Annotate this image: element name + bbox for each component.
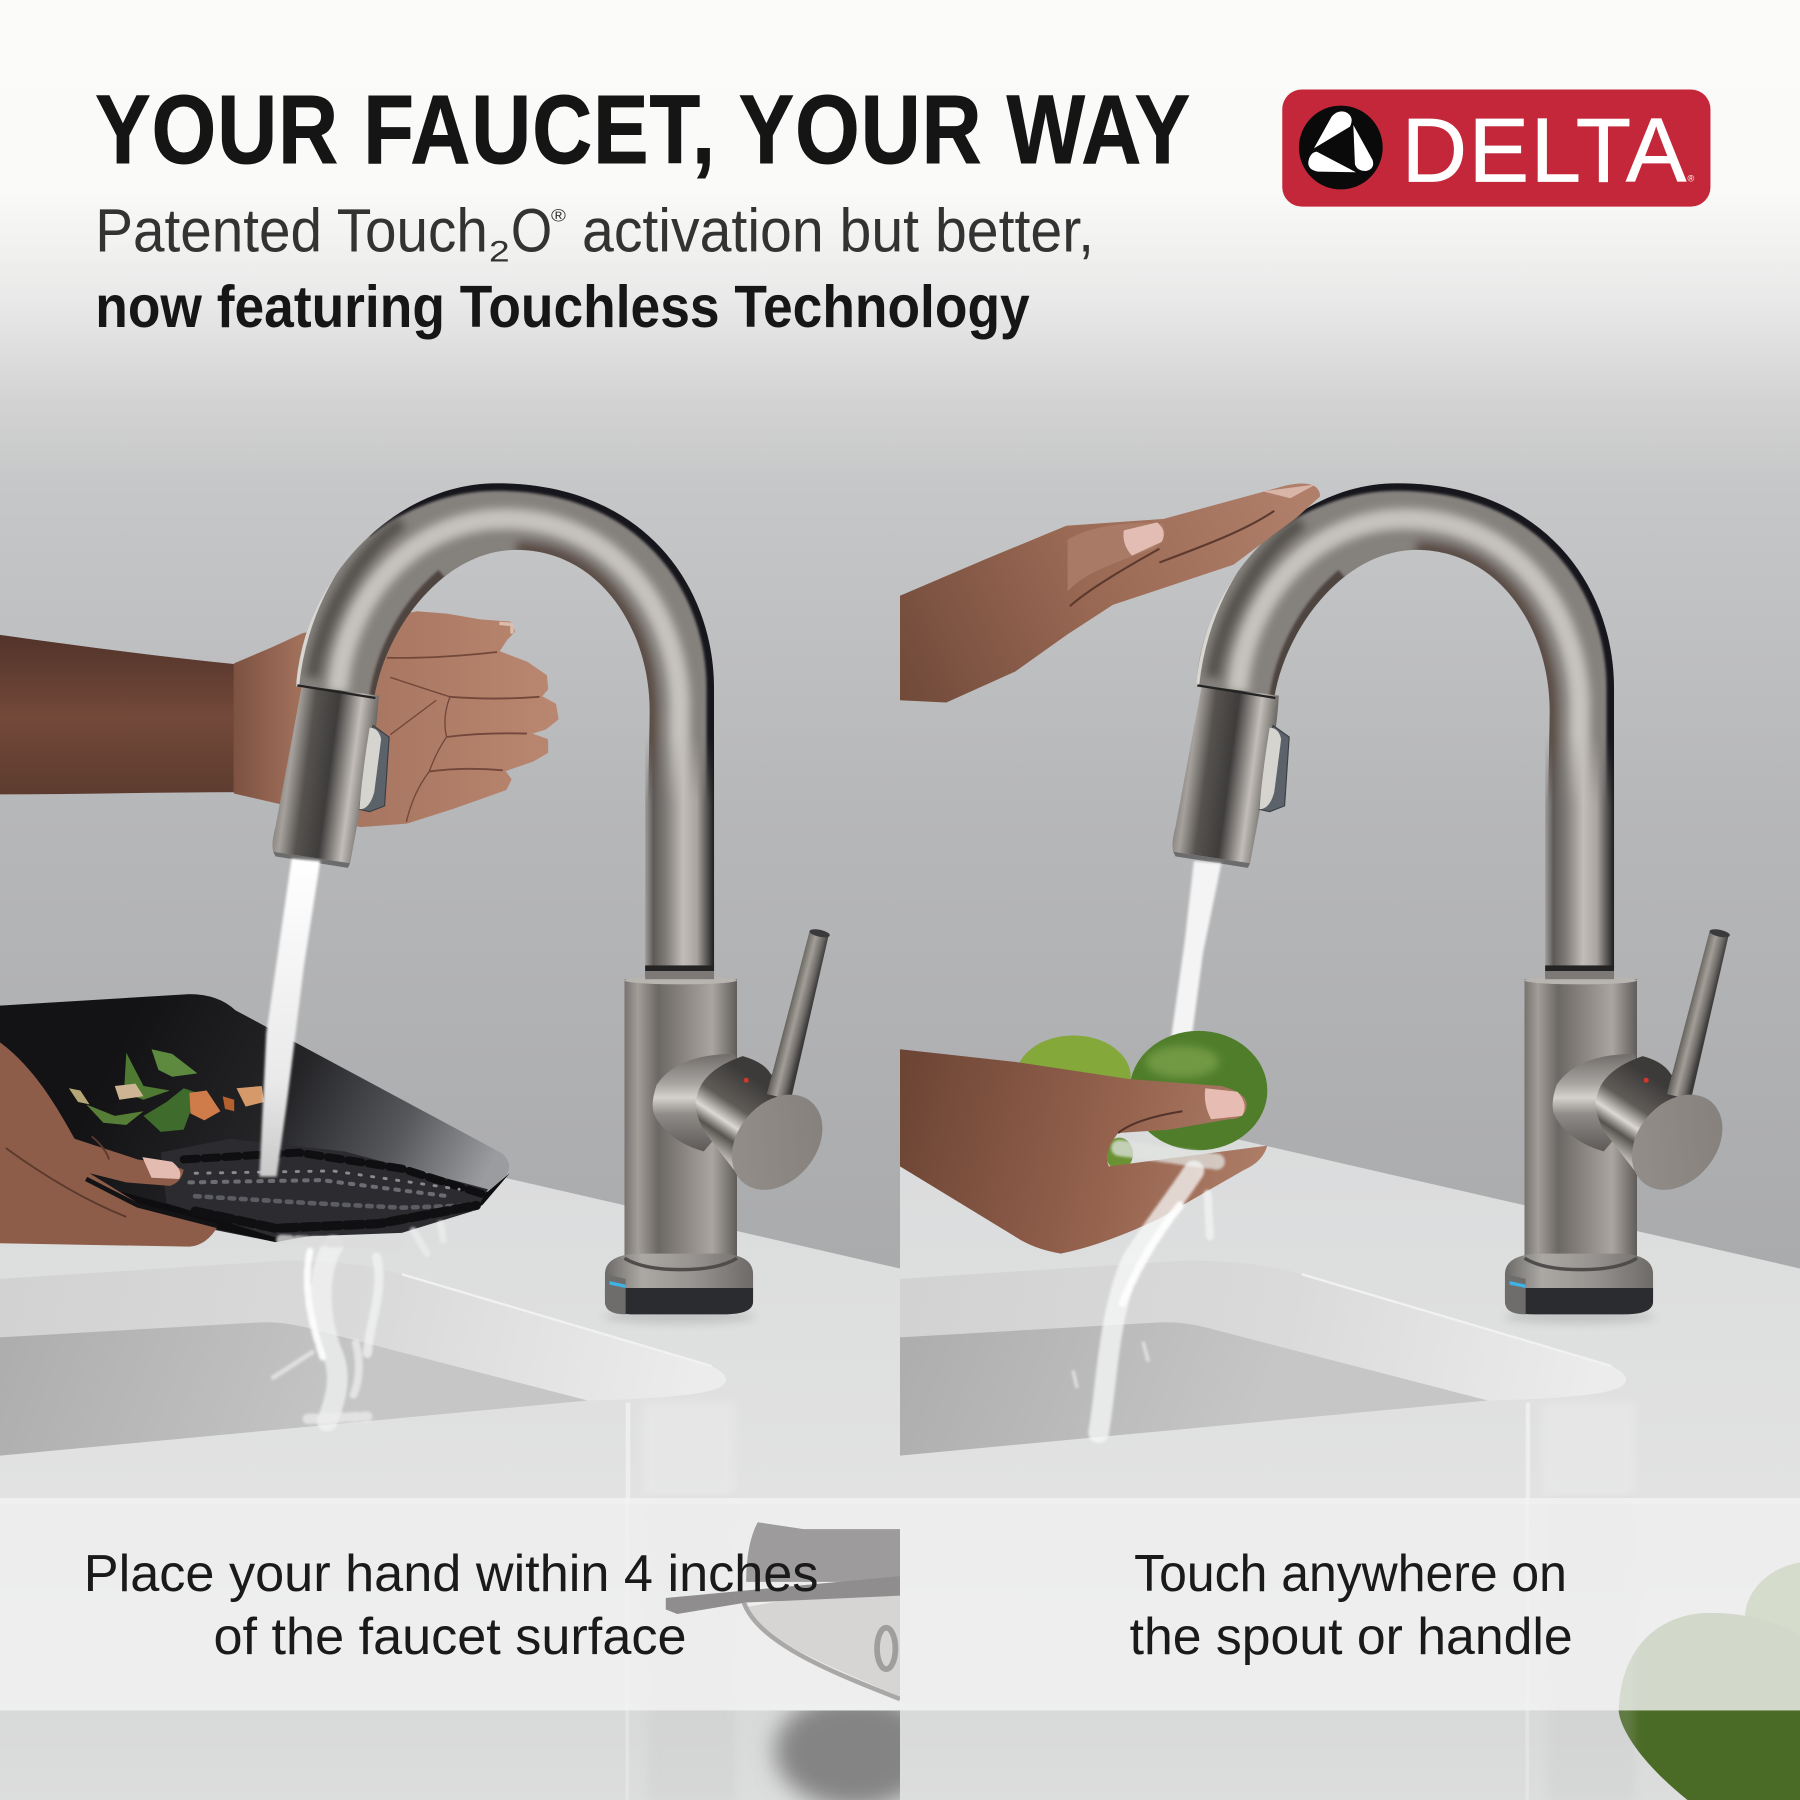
water falling from plate [273,1224,443,1421]
caption left [84,1544,818,1665]
hand holding limes [900,1049,1267,1254]
subheading line 1: Patented Touch [95,196,488,264]
reflection: plate shadow [762,1710,900,1800]
hand holding plate [0,1042,218,1247]
Delta logo: ® [1688,173,1695,183]
panel: lime rinse scene [900,483,1800,1504]
caption left: of the faucet surface [214,1607,686,1665]
reflection streaks [626,1497,1635,1800]
caption right: the spout or handle [1130,1607,1573,1665]
Delta logo [1282,90,1710,207]
faucet, left [272,483,841,1324]
food scraps [69,1049,264,1132]
headline: YOUR FAUCET, YOUR WAY [95,76,1190,185]
subheading line 1: 2 [489,236,510,269]
water falling from hand [1073,1148,1217,1433]
panel: plate rinse scene [0,483,900,1504]
limes [1016,1031,1267,1170]
counter and sink, right [900,1131,1800,1498]
wordmark: DELTA [1402,100,1687,201]
subheading line 1: activation but better, [582,196,1094,264]
faucet, right [1172,483,1741,1324]
water stream, left [259,859,320,1177]
icon: delta mark [1299,106,1383,189]
subheading line 1: ® [551,206,566,226]
floor reflection background [0,1497,1800,1800]
caption right [1130,1544,1573,1665]
reflection: plate through band [666,1522,900,1699]
caption band [0,1498,1800,1710]
caption left: Place your hand within 4 inches [84,1544,818,1602]
caption right: Touch anywhere on [1134,1544,1567,1602]
hand touching spout [900,484,1319,701]
water stream, right [1171,861,1221,1039]
reflection: limes [1619,1561,1800,1800]
plate [0,994,510,1242]
subheading line 1 [95,196,1094,269]
water pool on plate [161,1139,488,1238]
subheading line 1: O [511,196,552,264]
subheading line 2: now featuring Touchless Technology [95,273,1030,340]
hand near spout [0,613,557,825]
counter and sink, left [0,1178,900,1498]
